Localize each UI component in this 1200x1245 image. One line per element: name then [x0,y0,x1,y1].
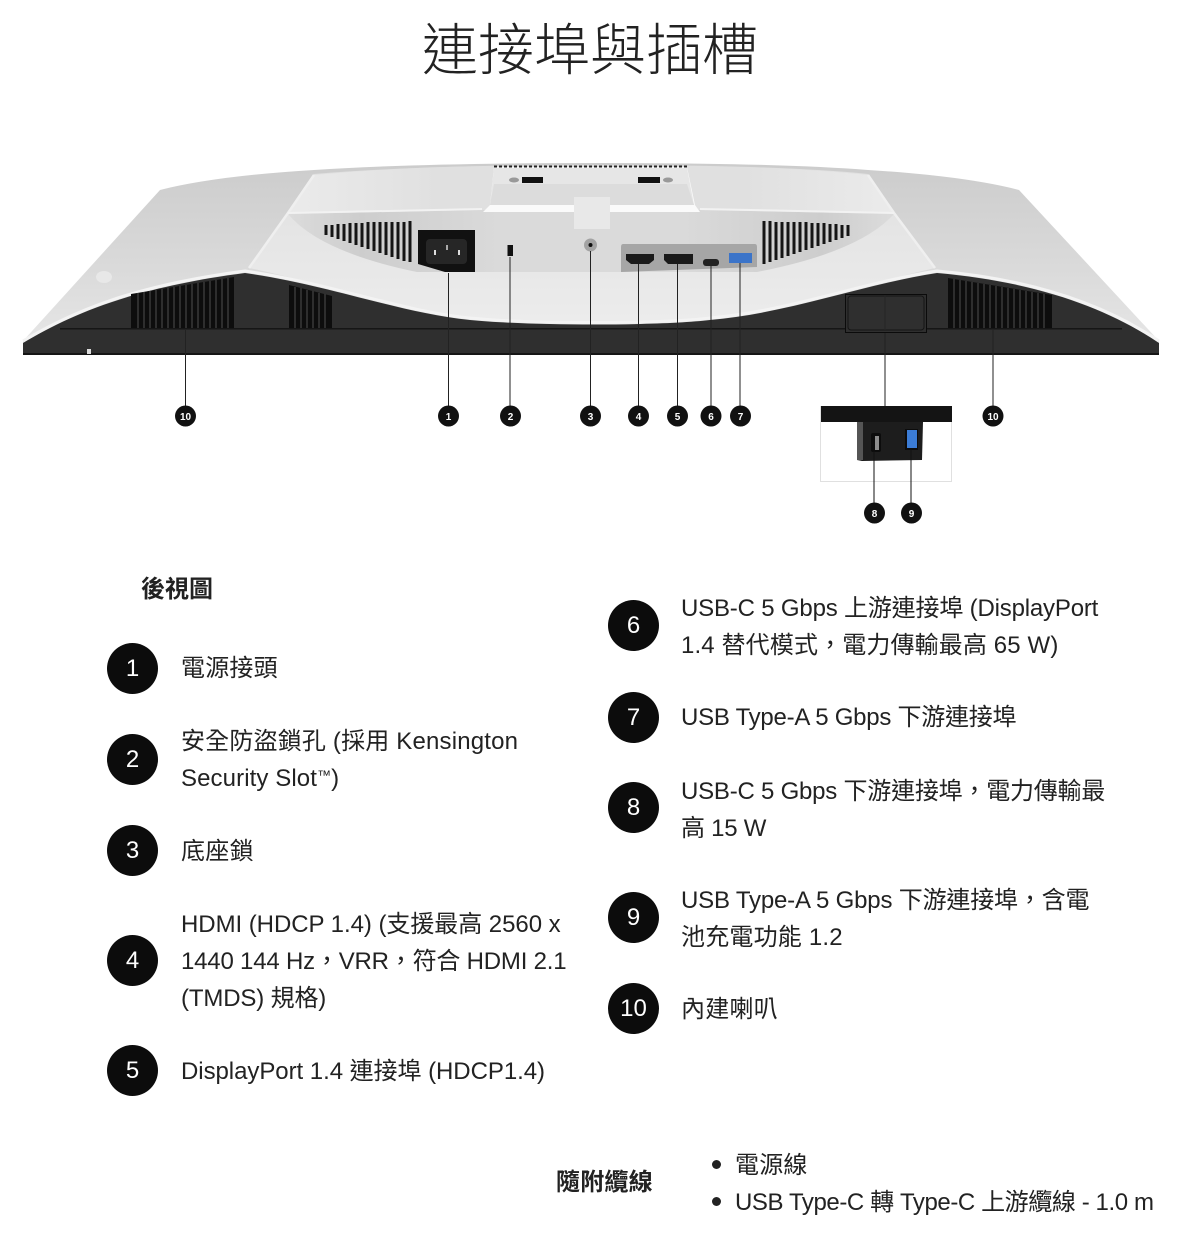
marker 10: 10 [620,995,647,1022]
marker 9 [608,892,659,943]
joystick button [96,271,112,283]
monitor body [23,163,1159,355]
item 5 text: DisplayPort 1.4 連接埠 (HDCP1.4) [181,1058,545,1085]
small callout markers: 5 [675,412,681,423]
dock inset detail [820,406,952,505]
small callout markers: 9 [909,509,915,520]
marker 6: 6 [627,612,640,639]
marker 2 [107,734,158,785]
item 6 text: USB-C 5 Gbps 上游連接埠 (DisplayPort [681,595,1098,622]
item 1 text: 電源接頭 [181,655,278,682]
item 4 text [181,911,566,1012]
item 6 text [681,595,1098,659]
item 4 text: 1440 144 Hz，VRR，符合 HDMI 2.1 [181,948,566,975]
item 4 text: (TMDS) 規格) [181,985,326,1012]
marker 10 [608,983,659,1034]
item 8 text: USB-C 5 Gbps 下游連接埠，電力傳輸最 [681,778,1105,805]
marker 3 [107,825,158,876]
center facet [249,165,935,323]
small callout markers: 6 [708,412,714,423]
item 8 text: 高 15 W [681,815,766,842]
item 2 text: 安全防盜鎖孔 (採用 Kensington [181,728,518,755]
item 3 text: 底座鎖 [181,838,254,865]
marker 3: 3 [126,837,139,864]
VESA mount notch [483,166,700,229]
light rim highlight [23,271,1159,341]
bullet list: included cables [712,1152,1154,1216]
bullet list: included cables: 電源線 [735,1152,808,1179]
marker 8 [608,782,659,833]
heading: rear view: 後視圖 [141,576,213,603]
marker 7 [608,692,659,743]
item 2 text [181,728,518,792]
DisplayPort port [664,254,693,264]
left upper vents [326,221,410,262]
marker 7: 7 [627,704,640,731]
marker 8: 8 [627,794,640,821]
item 4 text: HDMI (HDCP 1.4) (支援最高 2560 x [181,911,561,938]
small callout markers: 2 [508,412,514,423]
item 2 text: Security Slot™) [181,765,339,792]
marker 4: 4 [126,947,139,974]
item 9 text [681,887,1089,951]
cable dock bracket [846,294,926,332]
item 9 text: 池充電功能 1.2 [681,924,843,951]
marker 2: 2 [126,746,139,773]
item 8 text [681,778,1105,842]
marker 1 [107,643,158,694]
item 10 text: 內建喇叭 [681,996,778,1023]
dark lower housing [23,273,1159,355]
HDMI port [626,254,654,264]
heading: included cables: 隨附纜線 [556,1169,653,1196]
stand recess [249,166,935,272]
security lock slot [508,245,513,256]
USB-A port [729,253,752,263]
marker 1: 1 [126,655,139,682]
item 6 text: 1.4 替代模式，電力傳輸最高 65 W) [681,632,1058,659]
small callout markers: 1 [446,412,452,423]
small callout markers: 8 [872,509,878,520]
small callout markers: 3 [588,412,594,423]
power connector [418,230,475,272]
small callout markers: 10 [180,412,191,423]
item 9 text: USB Type-A 5 Gbps 下游連接埠，含電 [681,887,1089,914]
marker 6 [608,600,659,651]
bullet list: included cables: USB Type-C 轉 Type-C 上游纜線 - 1.0 m [735,1189,1154,1216]
port panel [621,244,757,272]
marker 5 [107,1045,158,1096]
small callout markers: 7 [738,412,744,423]
right upper vents [764,221,848,264]
small callout markers: 4 [636,412,642,423]
title: 連接埠與插槽 [422,6,758,87]
leader lines [186,251,993,406]
marker 9: 9 [627,904,640,931]
USB-C port [703,259,719,266]
marker 5: 5 [126,1057,139,1084]
small callout markers: 10 [987,412,999,423]
small callout markers [175,406,1004,524]
marker 4 [107,935,158,986]
item 7 text: USB Type-A 5 Gbps 下游連接埠 [681,704,1016,731]
lower speaker grilles [131,277,1052,328]
monitor rear view diagram [22,163,1160,524]
stand lock [584,238,597,252]
